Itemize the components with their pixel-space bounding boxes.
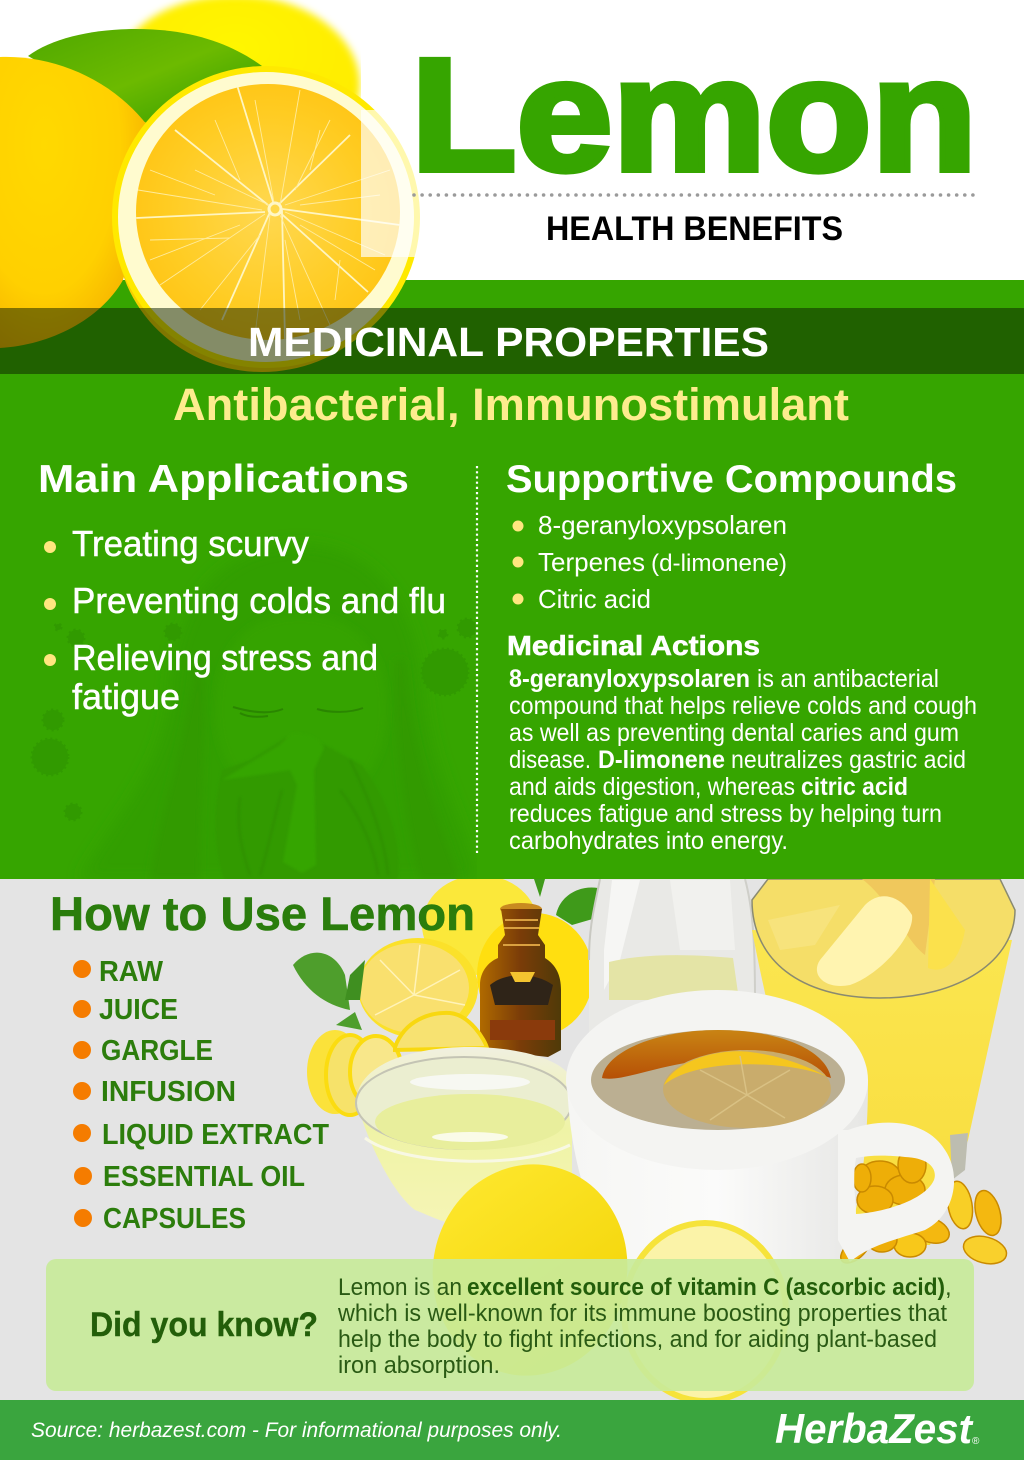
text: medicinal actions — [509, 665, 977, 855]
list item: essential oil: ESSENTIAL OIL — [103, 1161, 305, 1193]
image: lemon products — [293, 875, 1015, 1404]
footer background — [0, 1400, 1024, 1460]
list: ways to use lemon — [73, 956, 329, 1235]
list item: juice: JUICE — [99, 994, 178, 1026]
panel background — [46, 1259, 974, 1391]
heading: did you know: Did you know? — [90, 1306, 318, 1344]
essential oil bottle — [480, 903, 561, 1057]
dotted divider — [414, 193, 974, 197]
text: medicinal actions: disease. — [509, 746, 591, 774]
heading: main applications: Main Applications — [38, 458, 409, 501]
banner: dark band — [0, 308, 1024, 374]
whole lemon left — [0, 57, 148, 348]
text: medicinal actions: reduces fatigue and stress by helping turn — [509, 800, 942, 828]
text: vitamin C fact: excellent source of vitamin C (ascorbic acid) — [467, 1274, 945, 1301]
text: medicinal actions: and aids digestion, whereas — [509, 773, 795, 801]
heading: medicinal properties: MEDICINAL PROPERTIES — [248, 319, 769, 365]
text: medicinal actions: carbohydrates into energy. — [509, 827, 788, 855]
list: compounds: (d-limonene) — [651, 550, 787, 577]
image: sneezing woman background — [30, 618, 477, 878]
list: compounds: Terpenes — [538, 547, 645, 577]
list item: raw — [73, 956, 164, 988]
glass bowl of juice — [356, 1047, 572, 1230]
text: medicinal actions: neutralizes gastric acid — [731, 746, 966, 774]
list: applications: fatigue — [72, 676, 180, 717]
text: vitamin C fact: , — [945, 1274, 952, 1301]
lemon curl slices — [307, 1013, 487, 1115]
back lemon — [128, 0, 361, 123]
panel: how to use — [0, 879, 1024, 1400]
list item: liquid extract: LIQUID EXTRACT — [102, 1119, 329, 1151]
list item: gargle: GARGLE — [101, 1035, 213, 1067]
cut lemon front — [621, 1220, 789, 1404]
text: vitamin C fact: which is well-known for its immune boosting properties that — [337, 1300, 947, 1327]
text: medicinal actions: citric acid — [801, 773, 908, 801]
translucent white L ghost — [361, 110, 425, 257]
list item: raw: RAW — [99, 956, 164, 988]
glass bottle — [588, 879, 756, 1000]
text: medicinal actions: 8-geranyloxypsolaren — [509, 665, 750, 693]
list: applications: Relieving stress and — [72, 637, 378, 678]
lemon half — [358, 938, 478, 1038]
heading: medicinal actions: Medicinal Actions — [507, 630, 760, 661]
list: compounds — [512, 510, 787, 614]
tea mug — [566, 990, 868, 1270]
list: applications — [44, 523, 446, 717]
heading: how to use lemon: How to Use Lemon — [50, 887, 475, 940]
dotted column divider — [476, 466, 478, 853]
panel: supportive compounds — [506, 458, 977, 855]
list: applications: Preventing colds and flu — [72, 580, 446, 621]
text: vitamin C fact — [337, 1274, 952, 1379]
text: medicinal actions: compound that helps relieve colds and cough — [509, 692, 977, 720]
logo: HerbaZest: HerbaZest — [775, 1405, 974, 1452]
text: vitamin C fact: help the body to fight infections, and for aiding plant-based — [338, 1326, 937, 1353]
panel: main applications — [38, 458, 446, 717]
text: medicinal actions: is an antibacterial — [757, 665, 939, 693]
capsules — [840, 1156, 1008, 1265]
list item: infusion: INFUSION — [101, 1076, 236, 1108]
list: compounds: Citric acid — [538, 584, 651, 614]
subtitle: HEALTH BENEFITS — [546, 210, 843, 248]
leaf — [28, 29, 262, 125]
list: compounds: 8-geranyloxypsolaren — [538, 510, 787, 540]
cut lemon — [112, 66, 420, 372]
title: Lemon — [411, 25, 977, 204]
text: vitamin C fact: Lemon is an — [338, 1274, 462, 1301]
mug handle — [838, 1123, 954, 1262]
heading: supportive compounds: Supportive Compounds — [506, 458, 957, 501]
image: lemons — [0, 0, 425, 372]
text: medicinal actions: D-limonene — [598, 746, 725, 774]
list: applications: Treating scurvy — [72, 523, 309, 564]
panel: medicinal properties green background — [0, 280, 1024, 879]
big lemon — [432, 1164, 628, 1376]
list item: capsules: CAPSULES — [103, 1203, 246, 1235]
subheading: antibacterial: Antibacterial, Immunostimulant — [173, 379, 849, 430]
back lemon and leaves — [422, 875, 598, 1037]
source note: Source: herbazest.com - For informational purposes only. — [31, 1419, 562, 1442]
panel: did you know — [46, 1259, 974, 1391]
text: vitamin C fact: iron absorption. — [338, 1352, 500, 1379]
text: medicinal actions: as well as preventing dental caries and gum — [509, 719, 959, 747]
leaves — [293, 953, 365, 1030]
glass of juice — [752, 879, 1015, 1245]
footer — [0, 1400, 1024, 1460]
registered mark: ® — [972, 1436, 980, 1447]
